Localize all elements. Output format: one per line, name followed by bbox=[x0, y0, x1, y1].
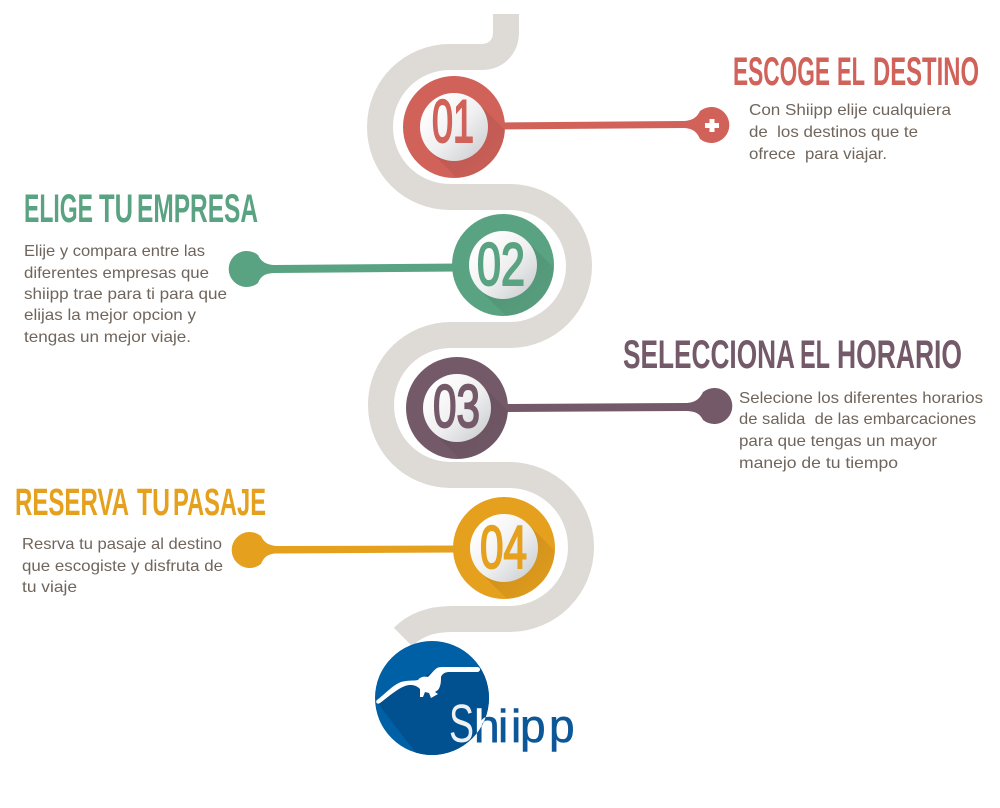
text block 3: manejo de tu tiempo bbox=[739, 455, 898, 472]
connector line 2 bbox=[229, 251, 460, 287]
text block 4: que escogiste y disfruta de bbox=[22, 558, 223, 575]
text block 3 bbox=[739, 390, 983, 472]
badge 03: 03 bbox=[433, 373, 480, 440]
heading 2: EMPRESA bbox=[137, 187, 258, 231]
logo wordmark: S bbox=[449, 694, 474, 754]
text block 2: diferentes empresas que bbox=[24, 265, 209, 282]
heading 1 bbox=[733, 50, 979, 94]
text block 1: Con Shiipp elije cualquiera bbox=[749, 102, 951, 119]
badge 01 bbox=[403, 76, 505, 178]
heading 1: EL bbox=[837, 50, 865, 94]
step 3 bbox=[406, 340, 982, 472]
text block 3: para que tengas un mayor bbox=[739, 433, 938, 450]
heading 3: SELECCIONA bbox=[623, 333, 795, 377]
step 4 bbox=[16, 488, 555, 599]
text block 3: Selecione los diferentes horarios bbox=[739, 390, 983, 407]
text block 1 bbox=[749, 102, 951, 163]
text block 2: tengas un mejor viaje. bbox=[24, 329, 191, 346]
Shiipp logo bbox=[375, 641, 573, 755]
logo wordmark: hiipp bbox=[474, 700, 575, 752]
badge 01: 01 bbox=[432, 88, 474, 155]
badge 02: 02 bbox=[477, 231, 525, 298]
heading 4: TU bbox=[137, 482, 170, 524]
heading 4: RESERVA bbox=[15, 482, 129, 524]
badge 02 bbox=[452, 214, 554, 316]
heading 2: TU bbox=[99, 187, 133, 231]
logo disc bbox=[375, 641, 489, 755]
logo long shadow bbox=[378, 668, 489, 755]
heading 3: EL bbox=[800, 333, 830, 377]
badge 03 bbox=[406, 357, 508, 459]
icon: seagull bbox=[376, 667, 480, 704]
text block 2: elijas la mejor opcion y bbox=[24, 307, 196, 324]
text block 2: Elije y compara entre las bbox=[24, 243, 205, 260]
step 1 bbox=[403, 57, 978, 178]
step 2 bbox=[24, 194, 554, 346]
heading 2 bbox=[24, 187, 258, 231]
text block 3: de salida de las embarcaciones bbox=[739, 411, 976, 428]
text block 2: shiipp trae para ti para que bbox=[24, 286, 227, 303]
text block 4 bbox=[22, 536, 223, 596]
icon: plus bbox=[705, 119, 719, 132]
winding road bbox=[380, 14, 581, 637]
heading 4: PASAJE bbox=[173, 482, 266, 524]
connector line 4 bbox=[232, 532, 460, 568]
text block 1: de los destinos que te bbox=[749, 124, 918, 141]
text block 4: tu viaje bbox=[22, 579, 77, 596]
text block 2 bbox=[24, 243, 227, 346]
badge 04: 04 bbox=[480, 514, 527, 581]
text block 1: ofrece para viajar. bbox=[749, 146, 887, 163]
connector line 1 bbox=[500, 107, 729, 143]
text block 4: Resrva tu pasaje al destino bbox=[22, 536, 222, 553]
heading 1: ESCOGE bbox=[733, 50, 830, 94]
logo wordmark: hiipp bbox=[474, 700, 575, 752]
badge 04 bbox=[453, 497, 555, 599]
heading 2: ELIGE bbox=[24, 187, 93, 231]
connector line 3 bbox=[500, 388, 732, 424]
